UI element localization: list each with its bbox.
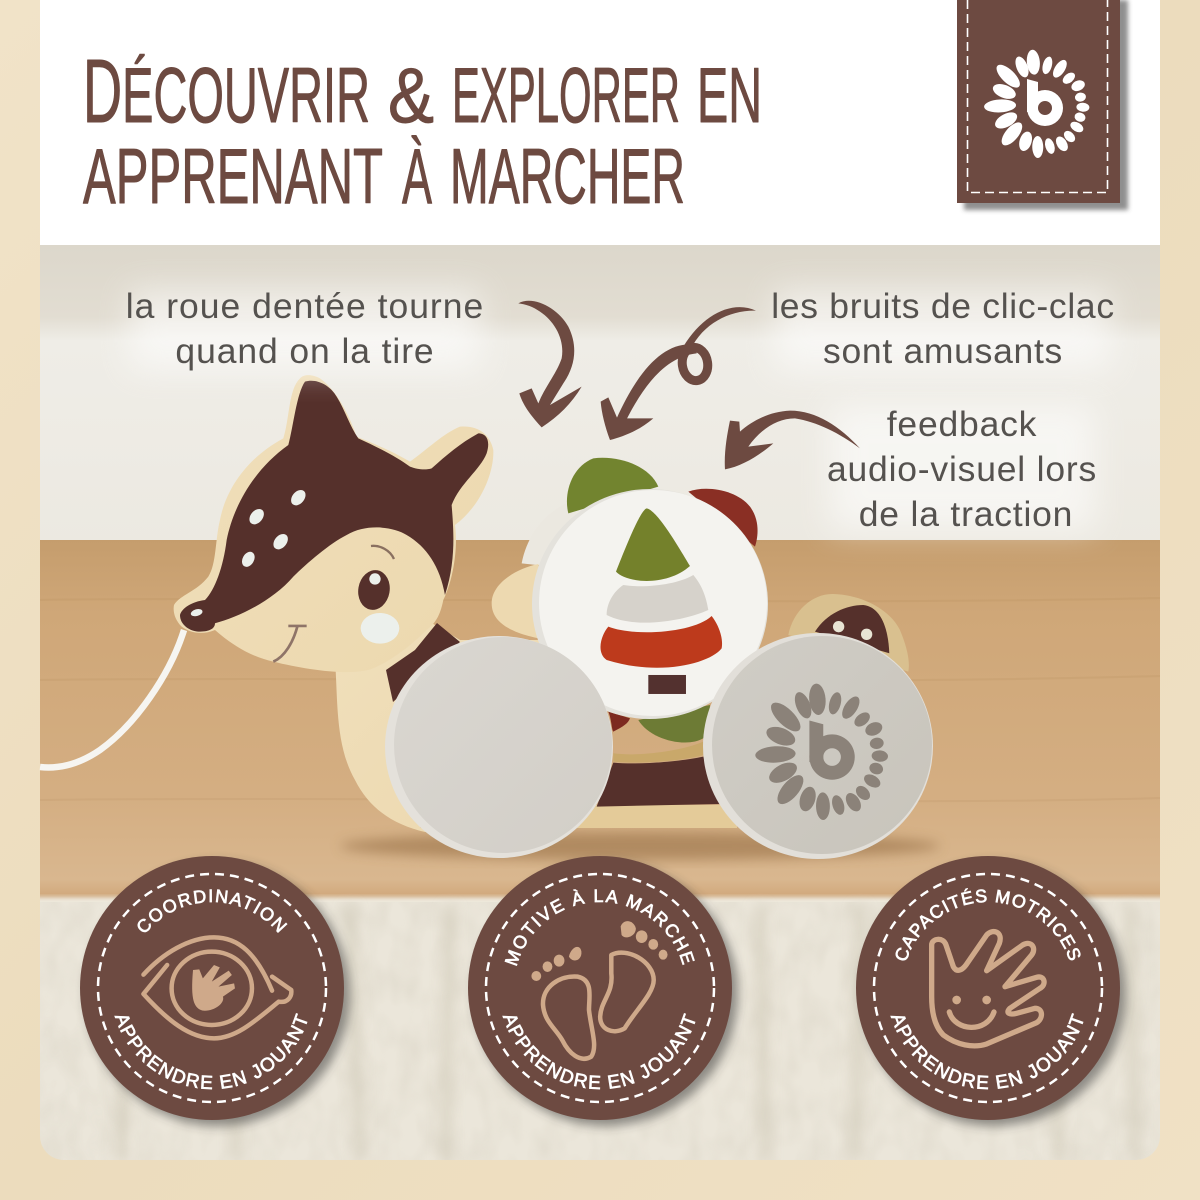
badge: coordination: COORDINATION [138,889,288,933]
toy: pull-along fawn [40,375,940,860]
icon: footprints [531,921,668,1059]
icon: eye with hand [143,937,291,1038]
badge: coordination [80,856,356,1132]
callout: audio-visual feedback [827,404,1097,534]
callout: click-clack [771,286,1115,371]
body and base [335,622,737,832]
photo panel [30,245,1170,1162]
title: DÉCOUVRIR [83,42,370,142]
title: À [402,132,432,220]
title: EXPLORER [452,51,680,139]
callout: audio-visual feedback: de la traction [859,494,1073,534]
badge: capacités motrices: APPRENDRE EN JOUANT [890,1013,1084,1090]
callout: gear wheel [126,286,484,371]
spinning disc front [532,489,768,719]
title [83,42,762,220]
badge: capacités motrices [856,856,1132,1132]
icon: wheel logo [755,683,888,820]
rear tail [788,594,909,672]
callout: gear wheel: quand on la tire [175,331,435,371]
toy shadow [340,832,940,860]
header panel [40,0,1160,245]
icon: sunflower logo [984,49,1090,158]
left wheel [385,636,613,858]
icon: smiling hand [932,932,1044,1046]
title: EN [697,51,762,139]
spinning disc petals [492,458,758,743]
logo tag [957,0,1128,210]
head [174,375,493,672]
title: & [388,51,434,139]
badge: motive à la marche: APPRENDRE EN JOUANT [502,1013,696,1090]
badge: coordination: APPRENDRE EN JOUANT [114,1013,308,1090]
callout: click-clack: sont amusants [823,331,1063,371]
callout: gear wheel: la roue dentée tourne [126,286,484,326]
wooden table [40,540,1160,905]
callout: audio-visual feedback: audio-visuel lors [827,449,1097,489]
title: MARCHER [450,132,685,220]
wall [40,245,1160,545]
arrow: gear wheel [518,301,582,427]
arrow: feedback [725,411,860,469]
pull string [40,630,184,767]
rug [30,897,1170,1162]
arrow: click-clack [601,307,756,440]
callout: audio-visual feedback: feedback [887,404,1037,444]
title: APPRENANT [83,132,383,220]
callout: click-clack: les bruits de clic-clac [771,286,1115,326]
right wheel with logo [703,633,933,859]
badge: motive à la marche [468,856,744,1132]
badge: capacités motrices: CAPACITÉS MOTRICES [896,888,1081,961]
badge: motive à la marche: MOTIVE À LA MARCHE [504,889,695,966]
